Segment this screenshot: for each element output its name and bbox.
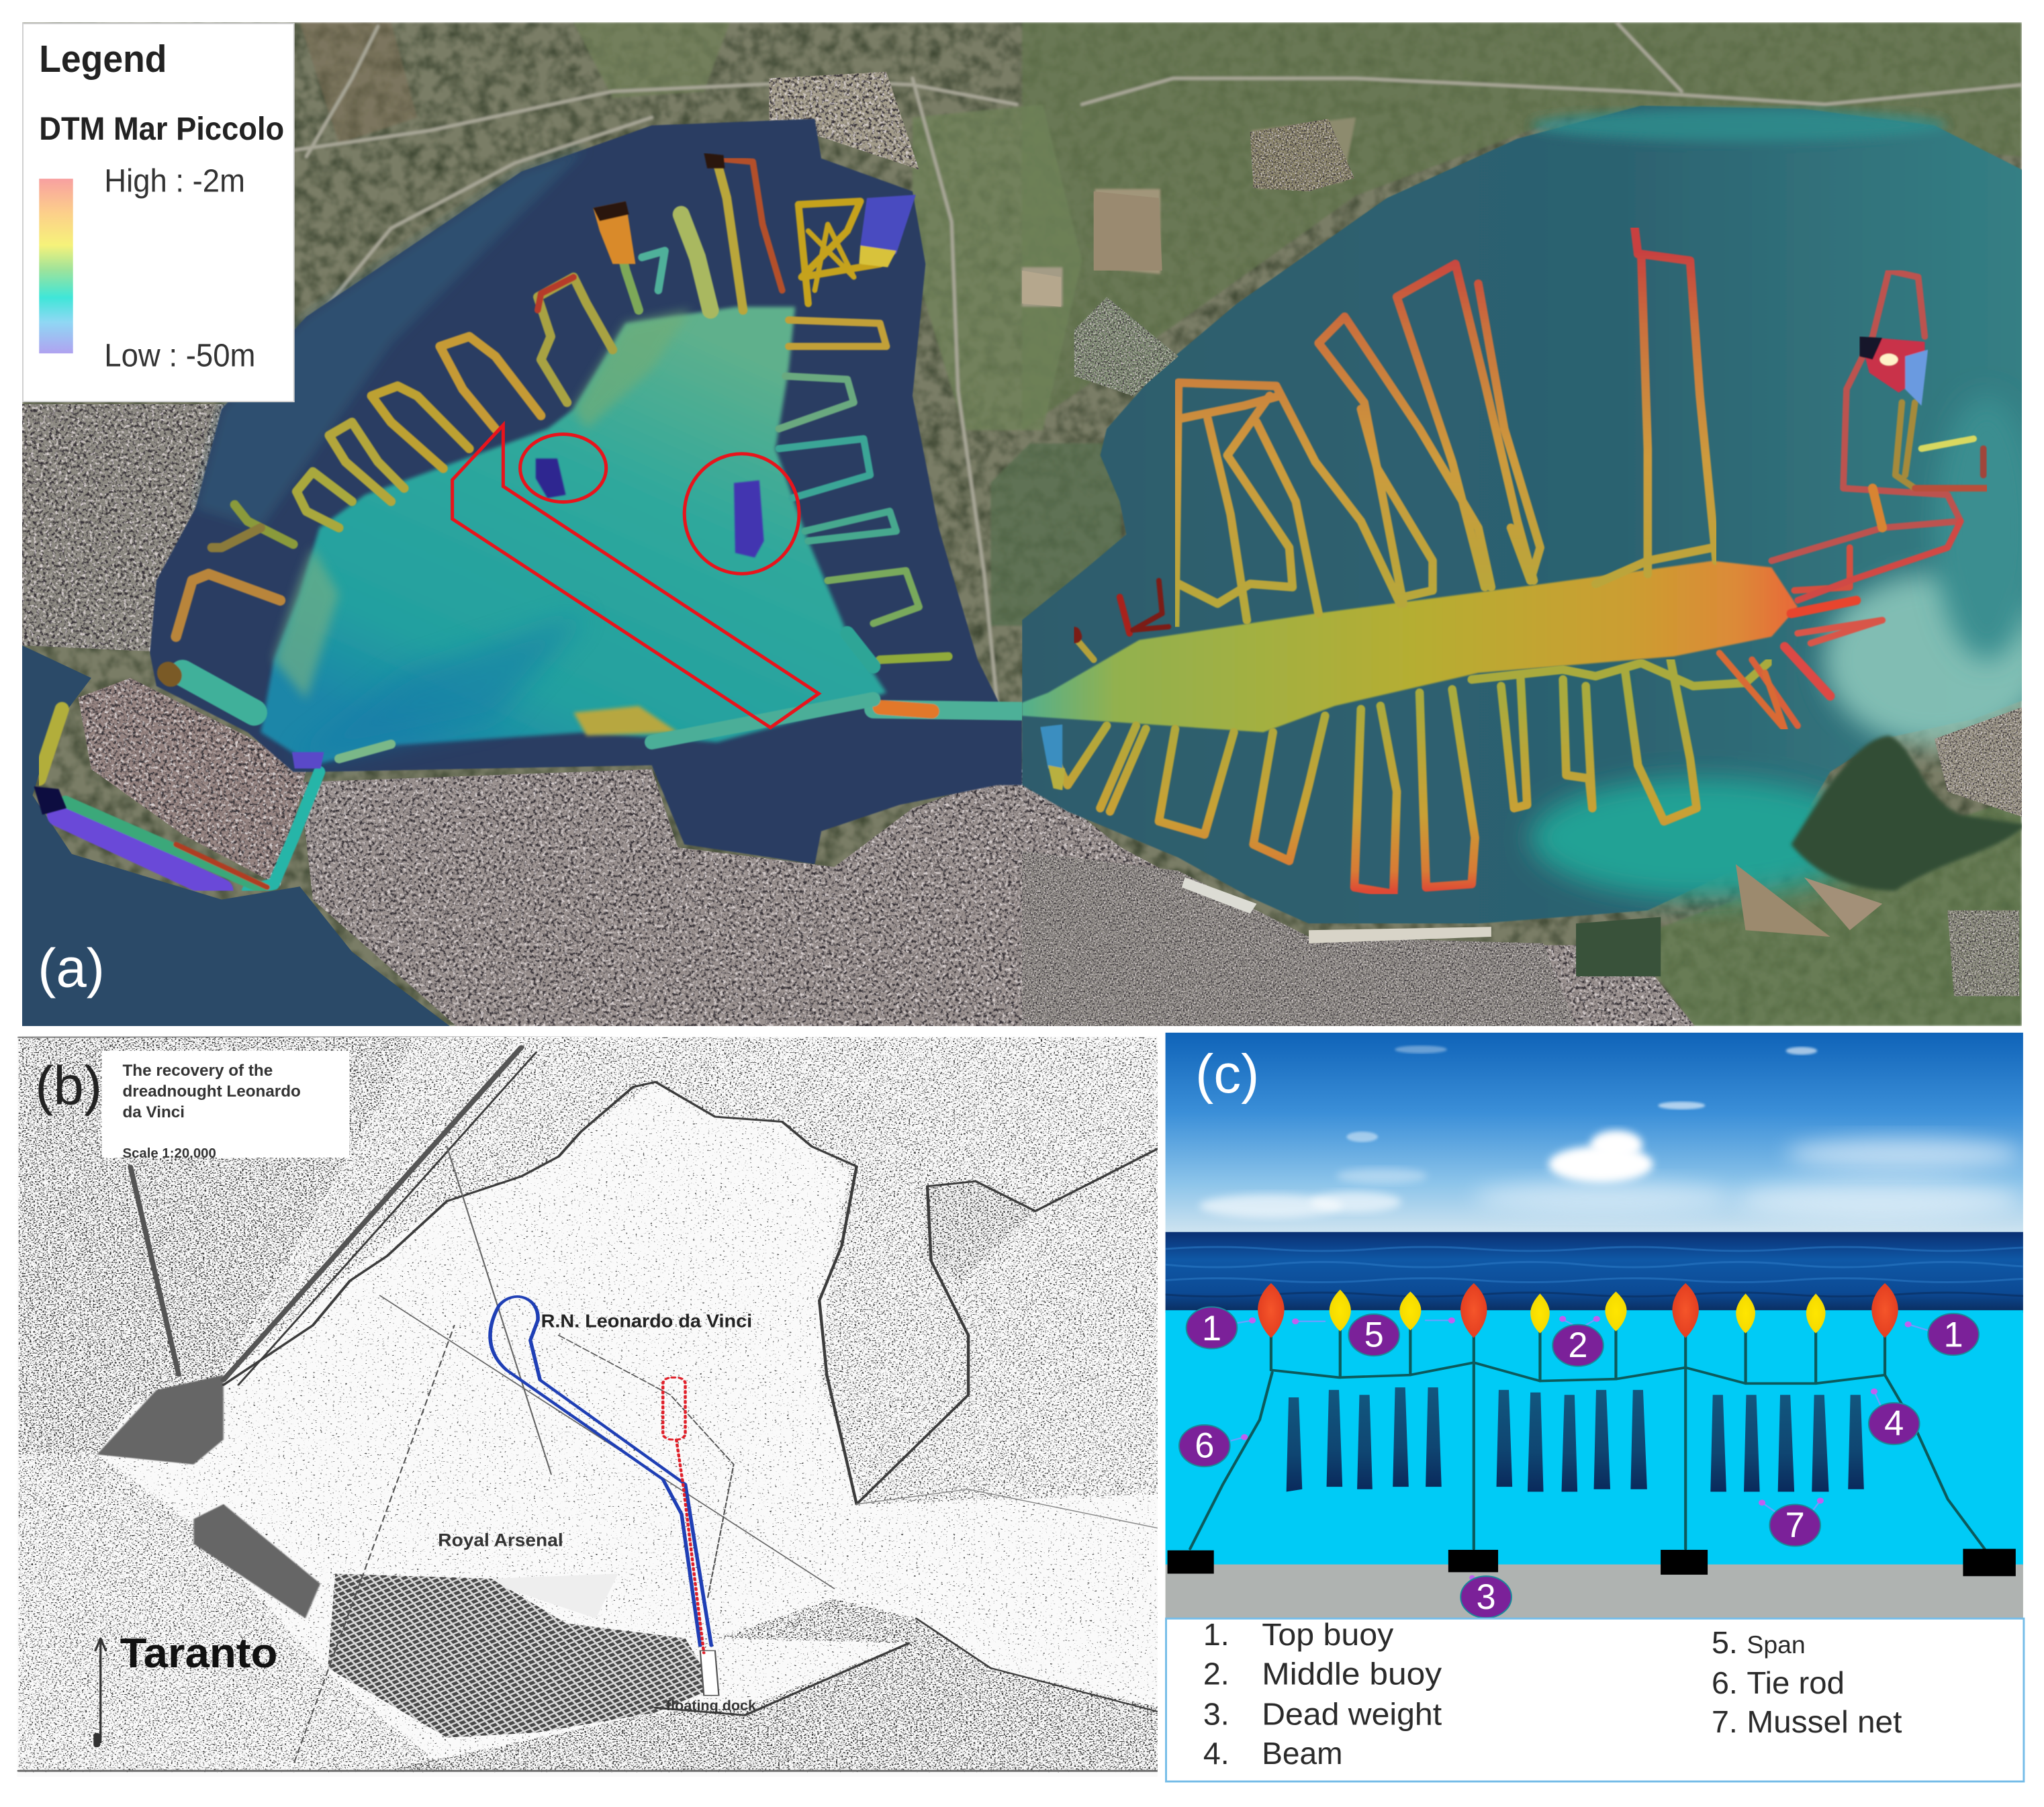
sea wave stripes bbox=[1166, 1247, 2044, 1297]
caption scale: Scale 1:20,000 bbox=[122, 1146, 216, 1161]
city south bbox=[300, 770, 1695, 1026]
DTM: first inlet coverage bbox=[34, 153, 1022, 890]
panel: (a) bathymetric DTM over satellite image bbox=[22, 22, 2044, 1027]
industrial area north bbox=[769, 72, 919, 170]
panel label (c): (c) bbox=[1195, 1044, 1259, 1105]
panel: (b) historic map of Taranto bbox=[17, 1034, 1162, 1777]
key: left column: 2. bbox=[1203, 1656, 1229, 1691]
DTM: second inlet main swath bbox=[1022, 228, 1987, 894]
numbered callouts: 7 bbox=[1785, 1506, 1805, 1545]
red top buoys bbox=[1258, 1283, 1898, 1338]
key: left column: Top buoy bbox=[1262, 1617, 1394, 1652]
map label: city: Taranto bbox=[120, 1630, 278, 1677]
first inlet water bbox=[150, 119, 1022, 864]
first inlet survey tracks bbox=[39, 158, 1022, 890]
legend colour bar bbox=[39, 179, 73, 353]
outer sea Mar Grande bbox=[22, 645, 450, 1026]
key: left column bbox=[1203, 1617, 1442, 1771]
panel: (c) mussel farm longline diagram bbox=[1166, 1033, 2044, 1781]
numbered callouts: 4 bbox=[1884, 1405, 1904, 1444]
city west bbox=[22, 404, 248, 652]
map coastlines and railways bbox=[19, 1034, 1162, 1771]
key: left column: Beam bbox=[1262, 1736, 1343, 1771]
survey blob NE bbox=[1859, 336, 1928, 406]
legend title: Legend bbox=[39, 38, 167, 80]
legend box bbox=[23, 24, 294, 402]
caption title: The recovery of the bbox=[122, 1062, 273, 1080]
map label: arsenal: Royal Arsenal bbox=[438, 1530, 563, 1550]
outline: red survey route bbox=[453, 425, 819, 727]
key: left column: 4. bbox=[1203, 1736, 1229, 1771]
key: right column: Tie rod bbox=[1747, 1665, 1845, 1700]
map paper bbox=[17, 1037, 1158, 1777]
circle: wreck left bbox=[520, 434, 606, 502]
sea floor bbox=[1166, 1565, 2023, 1618]
key: right column bbox=[1712, 1625, 1902, 1739]
key box bbox=[1166, 1617, 2024, 1781]
legend low label: Low : -50m bbox=[104, 338, 255, 374]
key: left column: 1. bbox=[1203, 1617, 1229, 1652]
city grid of Taranto bbox=[328, 1574, 715, 1738]
tracks south bbox=[1055, 659, 1771, 894]
callout leaders bbox=[1232, 1319, 1928, 1512]
key: right column: Span bbox=[1747, 1631, 1806, 1659]
map caption box bbox=[101, 1051, 349, 1161]
ropes and beams bbox=[1190, 1328, 1984, 1549]
panel label (a): (a) bbox=[38, 938, 105, 999]
numbered callouts: 5 bbox=[1364, 1316, 1384, 1355]
map label: ship: R.N. Leonardo da Vinci bbox=[541, 1310, 752, 1331]
underwater bbox=[1166, 1310, 2023, 1566]
tracks east bbox=[1074, 271, 1987, 729]
numbered callouts: 3 bbox=[1477, 1578, 1496, 1617]
roads bbox=[295, 22, 2022, 704]
yellow middle buoys bbox=[1330, 1289, 1825, 1334]
key: right column: 5. bbox=[1712, 1625, 1738, 1660]
key: right column: 7. bbox=[1712, 1704, 1738, 1739]
sky bbox=[1166, 1033, 2023, 1234]
numbered callouts: 1 bbox=[1943, 1316, 1963, 1355]
circle: wreck right bbox=[684, 454, 799, 573]
open sea band bbox=[1166, 1232, 2023, 1313]
satellite land base bbox=[22, 22, 2022, 1026]
wreck sonar target left bbox=[536, 459, 566, 498]
mussel nets bbox=[1287, 1387, 1864, 1491]
second inlet water bbox=[1022, 105, 2044, 923]
east headland and fields bbox=[1022, 119, 2026, 1027]
map artwork bbox=[19, 1034, 1162, 1772]
map label: dock: floating dock bbox=[666, 1698, 756, 1714]
survey blob south bbox=[1040, 725, 1065, 790]
caption title: dreadnought Leonardo bbox=[122, 1082, 301, 1101]
key: right column: 6. bbox=[1712, 1665, 1738, 1700]
longline structure bbox=[1168, 1283, 2016, 1580]
north arrow bbox=[95, 1638, 106, 1745]
key: left column: 3. bbox=[1203, 1697, 1229, 1732]
legend high label: High : -2m bbox=[104, 163, 245, 199]
planned route in red dots bbox=[663, 1377, 704, 1653]
tracks north bbox=[1175, 228, 1716, 627]
panel label (b): (b) bbox=[35, 1055, 102, 1116]
wreck sonar target right bbox=[734, 480, 764, 557]
legend subtitle: DTM Mar Piccolo bbox=[39, 111, 284, 147]
caption title: da Vinci bbox=[122, 1103, 185, 1121]
key: right column: Mussel net bbox=[1747, 1704, 1902, 1739]
numbered callouts: 2 bbox=[1568, 1326, 1588, 1365]
numbered callouts: 6 bbox=[1195, 1427, 1214, 1466]
dead weights bbox=[1168, 1549, 2016, 1576]
clouds bbox=[1199, 1046, 2020, 1217]
numbered callouts bbox=[1179, 1307, 1979, 1618]
key: left column: Dead weight bbox=[1262, 1697, 1442, 1732]
salvage route in blue bbox=[490, 1297, 711, 1646]
old town peninsula bbox=[78, 678, 306, 886]
key: left column: Middle buoy bbox=[1262, 1656, 1442, 1691]
survey blobs bbox=[34, 153, 916, 815]
numbered callouts: 1 bbox=[1202, 1309, 1221, 1348]
